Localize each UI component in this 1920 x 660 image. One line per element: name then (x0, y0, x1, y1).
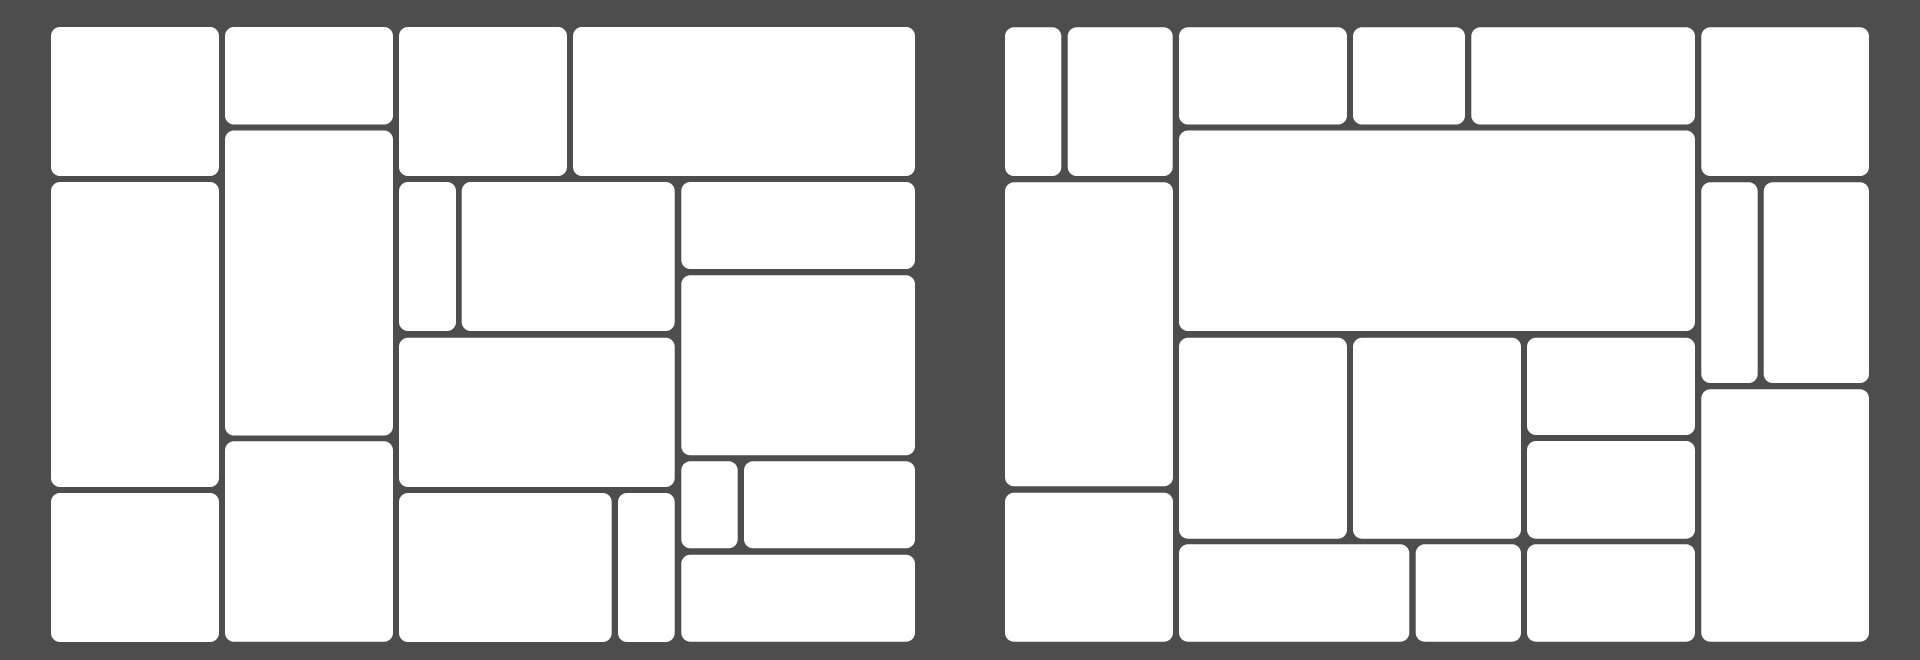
panel: lower center middle (1353, 338, 1521, 539)
panel: wide top right (573, 27, 915, 176)
panel: far right narrow (1701, 182, 1758, 383)
panel: medium middle (462, 182, 675, 331)
panel: bottom medium (399, 493, 612, 642)
panel: narrow top left (1005, 27, 1061, 176)
panel: lower center right bottom (1527, 441, 1695, 539)
panel: bottom row right (1527, 544, 1695, 642)
panel: bottom row small (1416, 544, 1521, 642)
left mosaic grid (51, 27, 915, 642)
panel: far right tall (1701, 389, 1869, 642)
panel: far right top (1701, 27, 1869, 176)
panel: lower center left (1179, 338, 1347, 539)
panel: right small wide (744, 461, 915, 548)
panel: right small square (681, 461, 738, 548)
panel: second column bottom (225, 441, 393, 642)
panel: top row third (1471, 27, 1695, 124)
panel: large center (1179, 130, 1695, 331)
panel: second column top (225, 27, 393, 124)
panel: left column bottom (51, 493, 219, 642)
panel: top row first (1179, 27, 1347, 124)
panel: bottom narrow (618, 493, 675, 642)
panel: right bottom (681, 555, 915, 642)
panel: wide lower middle (399, 338, 675, 487)
panel: top row second (1353, 27, 1465, 124)
panel: left bottom (1005, 493, 1173, 642)
panel: third column top (399, 27, 567, 176)
panel: narrow middle (399, 182, 456, 331)
panel: left column tall (51, 182, 219, 487)
panel: far right medium (1764, 182, 1869, 383)
right mosaic grid (1005, 27, 1869, 642)
panel: second column tall (225, 130, 393, 436)
panel: right large (681, 275, 915, 455)
panel: bottom row wide (1179, 544, 1409, 642)
panel: right short (681, 182, 915, 269)
panel: lower center right top (1527, 338, 1695, 435)
panel: left tall (1005, 182, 1173, 486)
panel: medium top left (1068, 27, 1173, 176)
panel: left column top (51, 27, 219, 176)
